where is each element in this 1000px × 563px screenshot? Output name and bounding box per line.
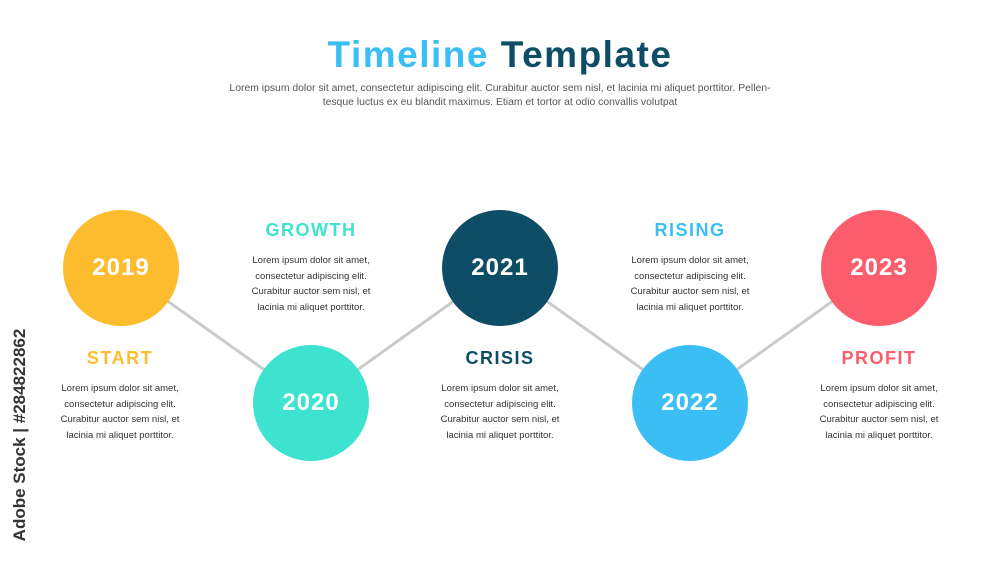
text RISING bbox=[631, 255, 750, 312]
circle 2023 bbox=[821, 210, 937, 326]
text RISING: lacinia mi aliquet porttitor. bbox=[636, 302, 744, 312]
title: Timeline Template bbox=[328, 34, 672, 75]
text CRISIS: lacinia mi aliquet porttitor. bbox=[446, 430, 554, 440]
text GROWTH: Curabitur auctor sem nisl, et bbox=[252, 286, 370, 297]
circle 2021 bbox=[442, 210, 558, 326]
text RISING: Lorem ipsum dolor sit amet, bbox=[631, 255, 749, 266]
circle 2020: 2020 bbox=[282, 389, 340, 416]
text CRISIS: Curabitur auctor sem nisl, et bbox=[441, 414, 559, 425]
circle 2022: 2022 bbox=[661, 389, 719, 416]
text START bbox=[61, 383, 180, 440]
text CRISIS bbox=[441, 383, 560, 440]
circle 2019: 2019 bbox=[92, 254, 150, 281]
text RISING: Curabitur auctor sem nisl, et bbox=[631, 286, 749, 297]
heading GROWTH: GROWTH bbox=[266, 220, 356, 240]
text PROFIT: consectetur adipiscing elit. bbox=[823, 398, 935, 410]
subtitle: tesque luctus ex eu blandit maximus. Etiam et tortor at odio convallis volutpat bbox=[323, 97, 677, 108]
text GROWTH bbox=[252, 255, 370, 312]
circle 2020 bbox=[253, 345, 369, 461]
text START: consectetur adipiscing elit. bbox=[64, 398, 176, 410]
circle 2022 bbox=[632, 345, 748, 461]
watermark side text: Adobe Stock | #284822862 bbox=[10, 329, 29, 541]
heading RISING: RISING bbox=[654, 220, 726, 240]
text PROFIT: Lorem ipsum dolor sit amet, bbox=[820, 383, 938, 394]
heading PROFIT: PROFIT bbox=[842, 348, 916, 368]
text PROFIT: Curabitur auctor sem nisl, et bbox=[820, 414, 938, 425]
text START: lacinia mi aliquet porttitor. bbox=[66, 430, 174, 440]
text RISING: consectetur adipiscing elit. bbox=[634, 270, 746, 282]
text CRISIS: Lorem ipsum dolor sit amet, bbox=[441, 383, 559, 394]
text GROWTH: Lorem ipsum dolor sit amet, bbox=[252, 255, 370, 266]
text PROFIT bbox=[820, 383, 938, 440]
subtitle: Lorem ipsum dolor sit amet, consectetur adipiscing elit. Curabitur auctor sem nisl, et lacinia mi aliquet porttitor. Pellen- bbox=[229, 83, 771, 94]
text GROWTH: lacinia mi aliquet porttitor. bbox=[257, 302, 365, 312]
heading START: START bbox=[87, 348, 153, 368]
text PROFIT: lacinia mi aliquet porttitor. bbox=[825, 430, 933, 440]
text GROWTH: consectetur adipiscing elit. bbox=[255, 270, 367, 282]
subtitle bbox=[229, 83, 771, 108]
text START: Curabitur auctor sem nisl, et bbox=[61, 414, 179, 425]
circle 2019 bbox=[63, 210, 179, 326]
text CRISIS: consectetur adipiscing elit. bbox=[444, 398, 556, 410]
heading CRISIS: CRISIS bbox=[465, 348, 534, 368]
circle 2021: 2021 bbox=[471, 254, 529, 281]
text START: Lorem ipsum dolor sit amet, bbox=[61, 383, 179, 394]
circle 2023: 2023 bbox=[850, 254, 908, 281]
